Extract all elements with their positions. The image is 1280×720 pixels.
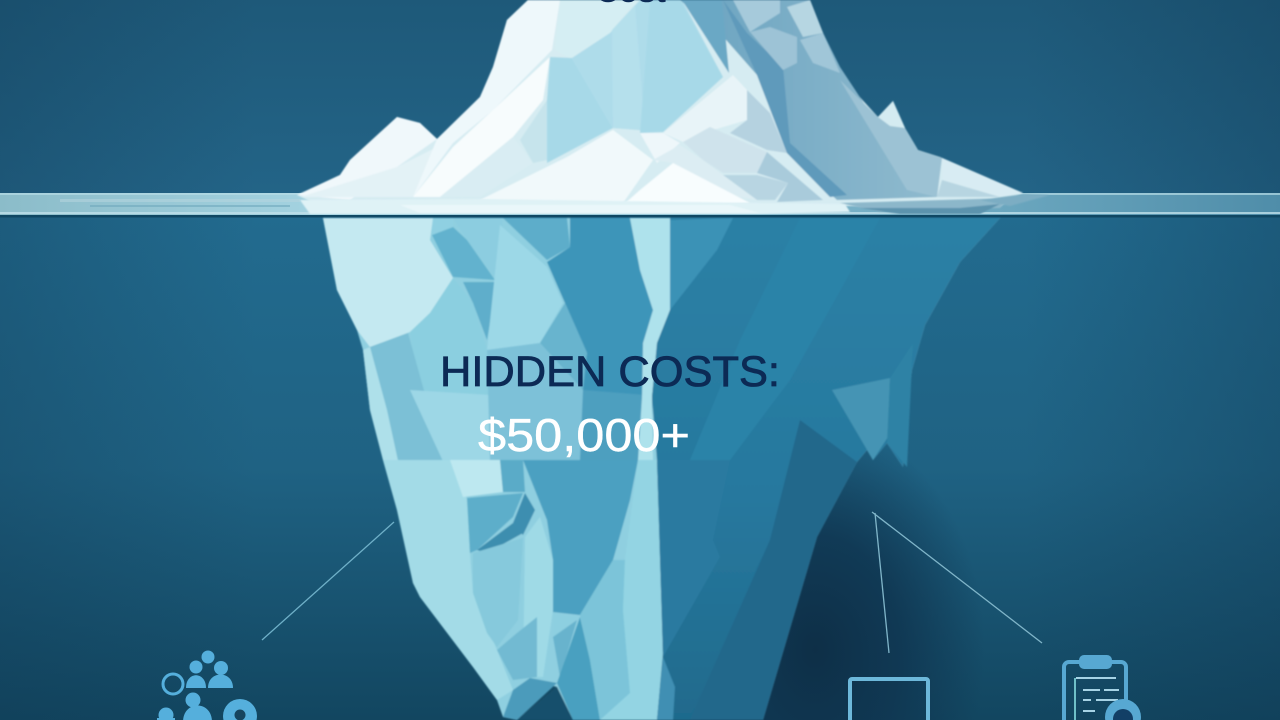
connector line to clipboard icon — [872, 512, 1042, 643]
central light column — [630, 218, 670, 460]
centre facets — [487, 225, 563, 350]
right dark mass — [652, 218, 1000, 720]
deep shadow under iceberg — [645, 420, 985, 720]
waterline dark rule — [0, 215, 1280, 218]
sky background — [0, 0, 1280, 195]
submerged silhouette — [323, 218, 1000, 720]
blue centre face left — [547, 57, 613, 163]
value: $50,000+: $50,000+ — [478, 409, 690, 461]
bright ice strip on waterline — [300, 194, 1050, 214]
left column facets — [370, 333, 447, 470]
icon: laptop screen — [850, 679, 928, 720]
icon: clipboard with badge — [1064, 655, 1141, 720]
heading: hidden costs: HIDDEN COSTS: — [440, 348, 780, 396]
light upper left — [323, 218, 453, 347]
iceberg tip silhouette — [297, 0, 1023, 206]
water surface band — [0, 193, 1280, 216]
ocean background — [0, 216, 1280, 720]
iceberg below water — [323, 218, 1000, 720]
dark notch at base — [517, 687, 573, 720]
icon: people group — [157, 650, 257, 720]
front ridges — [480, 130, 653, 203]
shaded right flank — [680, 0, 937, 200]
connector line to people icon — [262, 522, 394, 640]
left hump — [297, 117, 437, 200]
main left slope — [413, 0, 560, 197]
connector line to laptop icon — [875, 513, 889, 653]
right shard facets — [832, 378, 890, 460]
centre lower facets — [523, 460, 638, 615]
blue centre face right — [572, 0, 723, 132]
light cap — [555, 0, 640, 58]
lower left light — [383, 460, 513, 700]
iceberg above water — [297, 0, 1023, 206]
